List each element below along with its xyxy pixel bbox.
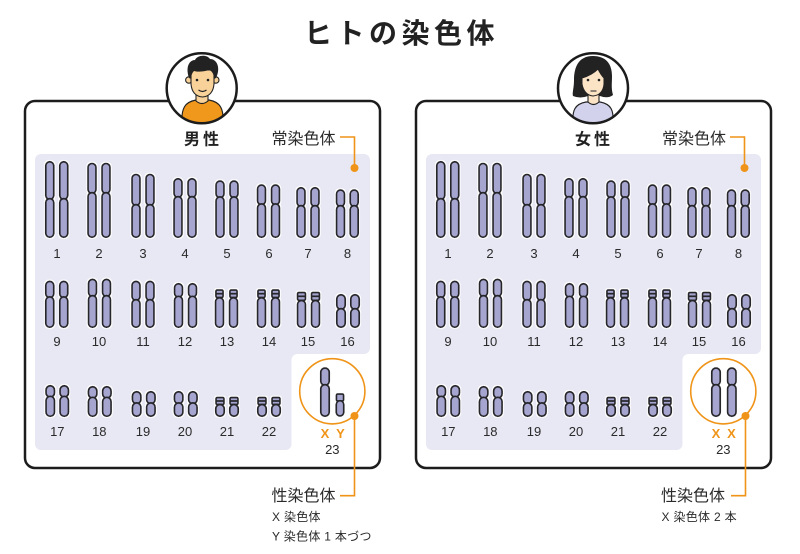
- chromosome numbers: female: 8: [735, 246, 742, 261]
- pair 7: [688, 188, 710, 237]
- pair 8: [336, 190, 358, 237]
- pair 4: [174, 179, 196, 237]
- chromosome numbers: male: 2: [95, 246, 103, 261]
- label: sex chromosomes male: 性染色体: [272, 487, 336, 505]
- icon: female avatar: [558, 53, 628, 124]
- note: X chromosome: X 染色体: [272, 509, 321, 524]
- chromosome numbers: male: 19: [136, 424, 150, 439]
- chromosome numbers: male: 3: [139, 246, 147, 261]
- sex chromosome letters: male: Y: [336, 426, 345, 441]
- chromosome numbers: female: 4: [572, 246, 580, 261]
- chromosome numbers: female: 13: [611, 334, 625, 349]
- heading: female: 女性: [575, 130, 613, 148]
- pair 11: [523, 281, 545, 327]
- chromosome numbers: male: 17: [50, 424, 65, 439]
- chromosome numbers: male: 9: [53, 334, 61, 349]
- pair 20: [174, 392, 197, 416]
- chromosome numbers: female: 19: [527, 424, 541, 439]
- title: ヒトの染色体: [304, 18, 499, 49]
- sex chromosome letters: male: X: [321, 426, 330, 441]
- pair 5: [216, 181, 238, 237]
- pair 16: [728, 295, 750, 327]
- chromosome numbers: female: 5: [614, 246, 622, 261]
- chromosome numbers: male: 12: [178, 334, 192, 349]
- chromosome numbers: male: 1: [53, 246, 61, 261]
- chromosome numbers: female: 14: [653, 334, 667, 349]
- frame: male: [25, 101, 380, 468]
- pair 15: [688, 292, 710, 327]
- label: autosomes: 常染色体: [662, 130, 726, 148]
- chromosome numbers: male: 18: [92, 424, 107, 439]
- chromosome numbers: female: 12: [569, 334, 583, 349]
- chromosome numbers: male: 8: [344, 246, 351, 261]
- pair 9: [437, 281, 459, 327]
- chromosome numbers: male: [50, 246, 355, 457]
- callout: autosomes: [730, 137, 748, 172]
- pair 8: [728, 190, 749, 237]
- chromosome numbers: male: 15: [301, 334, 315, 349]
- pair 13: [216, 290, 238, 327]
- chromosome numbers: female: 18: [483, 424, 498, 439]
- chromosome numbers: male: 16: [340, 334, 355, 349]
- chromosome numbers: male: 13: [220, 334, 234, 349]
- pair 9: [46, 281, 68, 327]
- chromosome numbers: male: 10: [92, 334, 106, 349]
- panel: male: [25, 53, 380, 544]
- chromosome numbers: female: 17: [441, 424, 456, 439]
- pair 10: [480, 279, 502, 327]
- callout: sex chromosomes female: [691, 359, 756, 496]
- chromosome numbers: male: 5: [223, 246, 231, 261]
- chromosome numbers: male: 11: [136, 334, 150, 349]
- pair 20: [565, 392, 588, 416]
- chromosome numbers: female: 11: [527, 334, 541, 349]
- chromosome numbers: female: 6: [656, 246, 664, 261]
- pair 3: [132, 174, 154, 237]
- pair 14: [648, 290, 670, 327]
- pair 19: [523, 392, 546, 416]
- pair 14: [258, 290, 280, 327]
- pair 21: [607, 398, 629, 416]
- autosome background: male: [35, 154, 370, 450]
- chromosome numbers: male: 6: [265, 246, 273, 261]
- chromosome numbers: male: 4: [181, 246, 189, 261]
- panel: female: [416, 101, 771, 524]
- chromosome numbers: female: [441, 246, 746, 457]
- pair 2: [479, 163, 501, 237]
- chromosome numbers: female: 16: [731, 334, 746, 349]
- sex chromosome letters: female: X: [727, 426, 736, 441]
- pair 7: [297, 188, 319, 237]
- label: autosomes: 常染色体: [272, 130, 336, 148]
- pair 1: [437, 162, 459, 237]
- chromosome numbers: male: 22: [262, 424, 276, 439]
- pair 19: [132, 392, 155, 416]
- chromosome numbers: male: 7: [304, 246, 312, 261]
- chromosomes: male: [46, 162, 359, 416]
- pair 5: [607, 181, 629, 237]
- pair 22: [649, 398, 671, 416]
- label: sex chromosomes female: 性染色体: [661, 487, 725, 505]
- note: two X chromosomes: X 染色体 2 本: [662, 509, 737, 524]
- pair 4: [565, 179, 587, 237]
- chromosome numbers: female: 23: [716, 442, 731, 457]
- pair 22: [258, 398, 280, 416]
- sex chromosome letters: female: X: [712, 426, 721, 441]
- chromosome numbers: female: 1: [444, 246, 452, 261]
- pair 13: [606, 290, 628, 327]
- chromosome numbers: male: 20: [178, 424, 192, 439]
- chromosomes: female: [437, 162, 750, 416]
- pair 18: [88, 387, 111, 416]
- heading: male: 男性: [184, 130, 222, 148]
- pair 23: X and X: [712, 368, 736, 416]
- chromosome numbers: male: 21: [220, 424, 234, 439]
- autosome background: female: [426, 154, 761, 450]
- chromosome numbers: female: 7: [695, 246, 703, 261]
- chromosome numbers: female: 10: [483, 334, 497, 349]
- note: Y chromosome: Y 染色体 1 本づつ: [272, 528, 372, 544]
- callout: sex chromosomes male: [300, 359, 365, 496]
- pair 1: [46, 162, 68, 237]
- pair 2: [88, 163, 110, 237]
- frame: female: [416, 101, 771, 468]
- pair 18: [479, 387, 502, 416]
- chromosome numbers: female: 3: [530, 246, 538, 261]
- pair 6: [258, 185, 280, 237]
- pair 23: X and Y: [321, 368, 344, 416]
- sex chromosome letters: female: [712, 426, 736, 441]
- chromosome numbers: female: 20: [569, 424, 583, 439]
- sex chromosome letters: male: [321, 426, 345, 441]
- chromosome numbers: female: 2: [486, 246, 494, 261]
- chromosome numbers: male: 23: [325, 442, 340, 457]
- chromosome numbers: female: 15: [692, 334, 706, 349]
- chromosome numbers: female: 21: [611, 424, 625, 439]
- pair 11: [132, 281, 154, 327]
- pair 12: [566, 284, 588, 327]
- pair 17: [437, 386, 460, 416]
- chromosome numbers: female: 9: [444, 334, 452, 349]
- pair 12: [174, 284, 196, 327]
- pair 15: [298, 292, 320, 327]
- icon: male avatar: [167, 53, 237, 124]
- pair 3: [523, 174, 545, 237]
- pair 10: [88, 279, 110, 327]
- chromosome numbers: male: 14: [262, 334, 276, 349]
- pair 21: [216, 398, 238, 416]
- chromosome numbers: female: 22: [653, 424, 667, 439]
- pair 17: [46, 386, 68, 416]
- pair 6: [648, 185, 670, 237]
- callout: autosomes: [340, 137, 358, 172]
- pair 16: [337, 295, 359, 327]
